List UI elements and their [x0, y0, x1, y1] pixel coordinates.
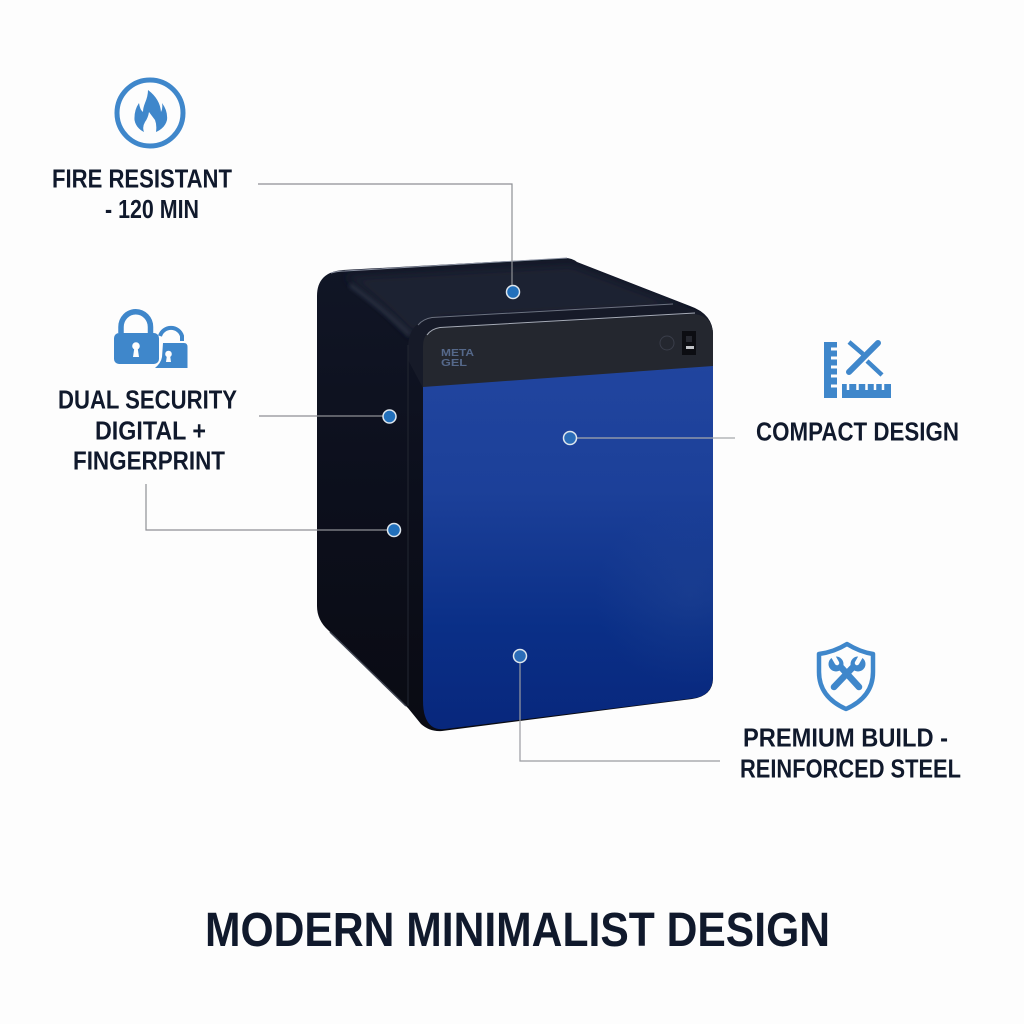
leader line: compact design: [570, 437, 735, 439]
label: premium build: REINFORCED STEEL: [740, 754, 961, 784]
label: dual security: DUAL SECURITY: [58, 384, 237, 414]
label: compact design: COMPACT DESIGN: [756, 416, 959, 446]
side seam: [407, 345, 409, 706]
front blue door panel: [423, 366, 713, 730]
title: MODERN MINIMALIST DESIGN: [205, 904, 830, 957]
front outer lip: [408, 304, 713, 388]
label: premium build: [740, 722, 961, 784]
marker dot: top: [506, 286, 520, 298]
leader line: dual security upper: [259, 415, 389, 417]
front dark display band: [423, 314, 713, 388]
marker dot: side upper: [383, 410, 396, 423]
marker dot: bottom: [514, 650, 526, 662]
label: premium build: PREMIUM BUILD -: [743, 722, 948, 752]
front bezel highlight: [427, 313, 695, 335]
leader line: fire resistant: [258, 184, 512, 291]
top edge highlight: [331, 258, 567, 273]
icon: flame in circle: [117, 80, 183, 146]
leader line: premium build: [520, 656, 720, 761]
safe body silhouette: [317, 258, 713, 731]
brand logo: [441, 348, 474, 369]
bottom edge highlight: [330, 632, 406, 706]
lip highlight: [418, 304, 673, 325]
safe top face shading: [345, 264, 690, 336]
keypad slot: [682, 331, 696, 355]
safe product illustration: [317, 258, 713, 732]
brand logo: META: [441, 348, 474, 359]
label: dual security: DIGITAL +: [95, 416, 206, 446]
fingerprint sensor ring: [660, 336, 674, 350]
leader line: dual security lower: [146, 484, 393, 530]
label: dual security: FINGERPRINT: [73, 446, 225, 476]
marker dot: front: [564, 432, 576, 444]
brand logo: GEL: [441, 358, 467, 369]
label: fire resistant: - 120 MIN: [105, 194, 199, 224]
label: fire resistant: FIRE RESISTANT: [52, 164, 232, 194]
icon: shield with wrenches: [819, 644, 873, 709]
icon: rulers and crossed tools: [824, 342, 891, 398]
marker dot: side lower: [388, 524, 400, 536]
icon: two padlocks: [114, 312, 188, 368]
label: dual security: [58, 384, 237, 476]
label: fire resistant: [52, 164, 232, 224]
